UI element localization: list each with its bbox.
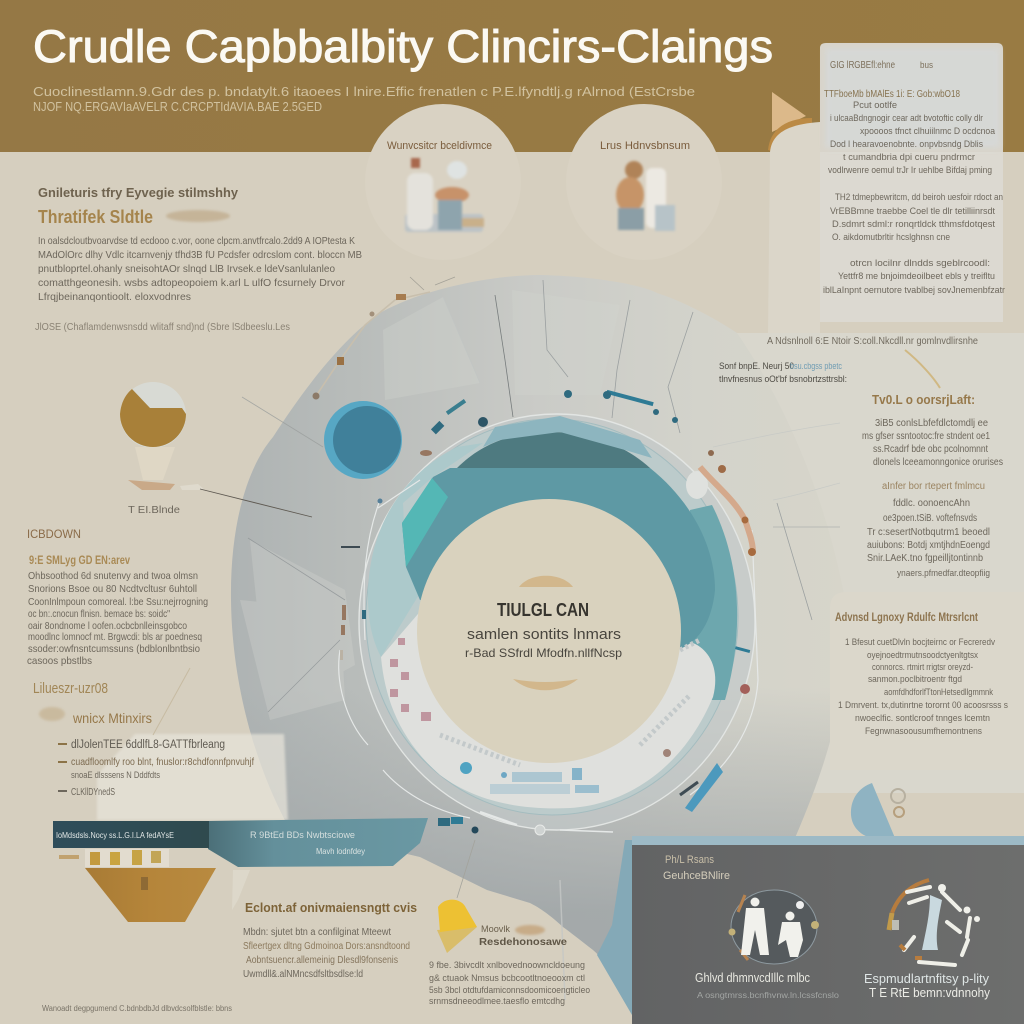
gold subheading: 9:E SMLyg GD EN:arev bbox=[29, 553, 130, 567]
orange band on ring bbox=[663, 450, 756, 757]
small ring annotation: Sonf bnpE. Neurj 50 bbox=[719, 361, 794, 371]
left lower list block: Lilueszr-uzr08 bbox=[33, 680, 108, 697]
cream centre disc bbox=[417, 499, 681, 763]
subtitle: Cuoclinestlamn.9.Gdr des p. bndatylt.6 itaoees I lnire.Effic frenatlen c P.E.lfyndtlj.g rAlrnod (EstCrsbe bbox=[33, 84, 695, 99]
brown wire knots bbox=[340, 450, 432, 660]
small ring annotation: bsu.cbgss pbetc bbox=[790, 361, 842, 371]
lower middle text block: Eclont.af onivmaiensngtt cvis bbox=[245, 900, 417, 915]
main teal bowl bbox=[402, 468, 715, 648]
right text block two: Snir.LAeK.tno fgpeilljtontinnb bbox=[867, 553, 983, 564]
paragraph bbox=[862, 418, 1003, 468]
grey disc facets bbox=[240, 290, 620, 720]
list icon smudge bbox=[39, 707, 65, 721]
panel text: VrEBBmne traebbe Coel tle dlr tetilliinrsdt bbox=[830, 206, 995, 217]
panel text: Yettfr8 me bnjoimdeoilbeet ebls y treifltu bbox=[838, 271, 995, 282]
blue circle node bbox=[324, 401, 402, 479]
panel paragraph: nwoeclfic. sontlcroof tnnges lcemtn bbox=[855, 713, 990, 724]
panel paragraph: oyejnoedtrmutnsoodctyenltgtsx bbox=[867, 650, 978, 661]
ribbon text: R 9BtEd BDs Nwbtsciowe bbox=[250, 830, 355, 841]
paragraph: srnmsdneeodlmee.taesflo emtcdhg bbox=[429, 996, 565, 1007]
intro paragraph bbox=[38, 235, 362, 303]
right text block two: aInfer bor rtepert fmlmcu bbox=[882, 481, 985, 492]
right top heading: A Ndsnlnoll 6:E Ntoir S:coll.Nkcdll.nr gomlnvdlirsnhe bbox=[767, 336, 978, 347]
paragraph: Ohbsoothod 6d snutenvy and twoa olmsn bbox=[28, 570, 198, 582]
list items: cuadfloomlfy roo blnt, fnuslor:r8chdfonnfpnvuhjf bbox=[71, 757, 254, 768]
paragraph: oair 8ondnome l oofen.ocbcbnlleinsgobco bbox=[28, 620, 187, 632]
panel paragraph: connorcs. rtmirt rrigtsr oreyzd- bbox=[872, 662, 973, 673]
icon: blue half globe bbox=[851, 783, 905, 840]
panel: dark bottom right bbox=[597, 836, 1024, 1024]
right text block two: Tr c:sesertNotbqutrm1 beoedl bbox=[867, 527, 990, 538]
tray tick marks bbox=[440, 640, 700, 765]
panel text: i ulcaaBdngnogir cear adt bvotoftic colly dlr bbox=[830, 113, 983, 124]
panel text: Dod l hearavoenobnte. onpvbsndg Dblis bbox=[830, 139, 983, 150]
panel: top right notes bbox=[820, 43, 1005, 322]
figure: clinicians bbox=[405, 158, 484, 232]
intro footnote: JlOSE (Chaflamdenwsnsdd wlitaff snd)nd (Sbre lSdbeeslu.Les bbox=[35, 322, 290, 333]
left middle text block: ICBDOWN bbox=[27, 527, 81, 541]
right text block two: auiubons: Botdj xmtjhdnEoengd bbox=[867, 540, 990, 551]
paragraph: moodlnc lomnocf mt. Brgwcdi: bls ar poednesq bbox=[28, 631, 202, 643]
panel paragraph: 1 Bfesut cuetDlvln bocjteirnc or Fecreredv bbox=[845, 637, 995, 648]
sublabel under left icon: A osngtmrss.bcnfhvnw.ln.lcssfcnslo bbox=[697, 991, 840, 1000]
bottom white tray bbox=[381, 600, 715, 808]
brown edge sprigs bbox=[312, 277, 455, 400]
left middle text block bbox=[27, 527, 208, 667]
panel text: t cumandbria dpi cueru pndrmcr bbox=[843, 152, 975, 163]
dark bar text: IoMdsdsls.Nocy ss.L.G.I.LA fedAYsE bbox=[56, 830, 174, 840]
paragraph: oc bn:.cnocun flnisn. bemace bs: soidc" bbox=[28, 608, 170, 620]
bowl highlight strip bbox=[483, 416, 652, 458]
paragraph: 9 fbe. 3bivcdlt xnlbovednoowncldoeung bbox=[429, 960, 585, 971]
translucent list panel bbox=[97, 734, 288, 820]
paragraph: ss.Rcadrf bde obc pcolnomnnt bbox=[873, 444, 988, 455]
small ring annotation: tlnvfnesnus oOt'bf bsnobrtzsttrsbl: bbox=[719, 374, 847, 384]
gold arc stroke bbox=[905, 350, 940, 388]
centre line: samlen sontits lnmars bbox=[467, 626, 621, 643]
right text block two: ynaers.pfmedfar.dteopfiig bbox=[897, 568, 990, 579]
bowl dark top bbox=[457, 432, 650, 468]
panel text: GIG lRGBEfl:ehne bbox=[830, 60, 895, 71]
blue wire connectors bbox=[341, 390, 750, 834]
wire node bbox=[535, 825, 545, 835]
paragraph: dlonels lceeamonngonice orurises bbox=[873, 457, 1003, 468]
panel pale grid area bbox=[825, 48, 1000, 148]
top lens bbox=[519, 576, 573, 587]
paragraph: ms gfser ssntootoc:fre stndent oe1 bbox=[862, 431, 990, 442]
blue wedge left of panel bbox=[597, 840, 632, 1015]
label under right icon: Espmudlartnfitsy p-lity bbox=[864, 971, 989, 986]
lower middle paragraph bbox=[243, 927, 410, 980]
panel text: vodlrwenre oemul trJr Ir uehlbe Bifdaj pming bbox=[828, 165, 992, 176]
outer wires bbox=[339, 480, 758, 832]
list items: snoaE dlsssens N Dddfdts bbox=[71, 770, 160, 780]
paragraph: g& ctuaok Nmsus bcbcootltnoeooxm ctl bbox=[429, 973, 585, 984]
icon: funnel with coins bbox=[59, 849, 216, 922]
paragraph: 5sb 3bcl otdtufdamiconnsdoomicoengticleo bbox=[429, 985, 590, 996]
icon: two clinicians bbox=[728, 890, 819, 964]
panel paragraph: Fegnwnasoousumfhemontnens bbox=[865, 726, 982, 737]
paragraph bbox=[429, 960, 590, 1007]
footer note: Wanoadt degpgumend C.bdnbdbJd dlbvdcsolfblstle: bbns bbox=[42, 1004, 232, 1013]
lower middle paragraph: Aobntsuencr.allemeinig Dlesdl9fonsenis bbox=[246, 955, 398, 966]
panel paragraph bbox=[838, 637, 1008, 737]
ribbon subtext: Mavh lodnfdey bbox=[316, 846, 366, 856]
right teal wall bbox=[690, 505, 737, 700]
icon: lightbulb gauge bbox=[120, 382, 312, 517]
panel text: iblLaInpnt oernutore tvablbej sovJnemenbfzatr bbox=[823, 285, 1005, 296]
ribbon: teal bar bbox=[208, 818, 428, 867]
circle title: Wunvcsitcr bceldivmce bbox=[387, 140, 492, 152]
paragraph: ssoder:owfnsntcumssuns (bdblonlbntbsio bbox=[28, 643, 200, 655]
left intro block bbox=[35, 185, 362, 333]
panel paragraph: sanmon.poclbitroentr ftgd bbox=[868, 674, 962, 685]
outer glass ring bbox=[359, 414, 755, 830]
bracket line bbox=[153, 668, 190, 735]
blue tray markers bbox=[460, 762, 599, 794]
circle: top left figure bbox=[365, 104, 521, 260]
right text block two: fddlc. oonoencAhn bbox=[893, 498, 970, 509]
main title: Crudle Capbbalbity Clincirs-Claings bbox=[33, 21, 773, 72]
left intro block: Gnileturis tfry Eyvegie stilmshhy bbox=[38, 185, 239, 200]
header banner bbox=[0, 0, 1024, 152]
pointer line bbox=[200, 489, 312, 517]
subtitle bbox=[33, 84, 695, 114]
paragraph: casoos pbstlbs bbox=[27, 655, 92, 667]
circle title: Lrus Hdnvsbnsum bbox=[600, 140, 690, 152]
panel text: xpoooos tfnct clhuiilnmc D ocdcnoa bbox=[860, 126, 996, 137]
central grey disc backdrop bbox=[231, 275, 846, 1024]
intro paragraph: MAdOlOrc dlhy Vdlc itcarnvenjy tfhd3B fU Pcdsfer odrcslom cont. bloccn MB bbox=[38, 249, 362, 261]
ribbon: dark bar bbox=[53, 821, 209, 848]
intro paragraph: pnutbloprtel.ohanly sneisohtAOr slnqd LlB Irvsek.e ldeVsanlulanleo bbox=[38, 263, 335, 275]
lower middle text block bbox=[232, 870, 417, 980]
lower middle paragraph: Sfleertgex dltng Gdmoinoa Dors:ansndtoond bbox=[243, 941, 410, 952]
panel: advanced notes bbox=[830, 592, 1024, 770]
centre heading: TIULGL CAN bbox=[497, 600, 589, 620]
lower middle paragraph: Uwmdll&.alNMncsdfsltbsdlse:ld bbox=[243, 969, 363, 980]
icon: gold wedge behind panel bbox=[768, 92, 820, 333]
panel text: Pcut ootlfe bbox=[853, 100, 897, 111]
subheading smudge bbox=[166, 210, 230, 222]
intro paragraph: Lfrqjbeinanqontioolt. eloxvodnres bbox=[38, 291, 191, 303]
section subheading: Thratifek Sldtle bbox=[38, 207, 153, 227]
list items: CLKllDYnedS bbox=[71, 787, 115, 798]
top blue strip bbox=[632, 836, 1024, 845]
yellow wedge text block bbox=[429, 924, 590, 1007]
figure: patient bbox=[616, 161, 675, 231]
list items bbox=[58, 739, 254, 798]
grey disc thin lines bbox=[242, 280, 840, 1000]
smudge bbox=[515, 925, 545, 935]
intro paragraph: In oalsdcloutbvoarvdse td ecdooo c.vor, oone clpcm.anvtfrcalo.2dd9 A IOPtesta K bbox=[38, 235, 355, 247]
pink tray markers bbox=[390, 638, 431, 721]
central ring diagram bbox=[339, 414, 758, 835]
pale bowl left bbox=[368, 443, 483, 657]
right text block one bbox=[862, 392, 1003, 468]
subtitle: NJOF NQ.ERGAVIaAVELR C.CRCPTIdAVIA.BAE 2.5GED bbox=[33, 99, 322, 114]
panel text bbox=[823, 60, 1005, 296]
blue lower clip bbox=[680, 763, 723, 812]
yellow wedge text block: Moovlk bbox=[481, 924, 510, 935]
right text block two: oe3poen.tSiB. voftefnsvds bbox=[883, 513, 977, 524]
gauge label: T EI.Blnde bbox=[128, 505, 180, 516]
sublabel under right icon: T E RtE bemn:vdnnohy bbox=[869, 985, 990, 1000]
centre small line: r-Bad SSfrdl Mfodfn.nllfNcsp bbox=[465, 646, 622, 660]
panel subheading: GeuhceBNlire bbox=[663, 870, 730, 882]
icon: yellow wedge bbox=[437, 840, 477, 953]
bright teal facet bbox=[402, 478, 448, 567]
paragraph bbox=[27, 570, 208, 667]
bottom lens bbox=[513, 679, 578, 690]
right text block two bbox=[867, 481, 990, 579]
right text block one: Tv0.L o oorsrjLaft: bbox=[872, 392, 975, 407]
panel text: O. aikdomutbrltir hcslghnsn cne bbox=[832, 232, 950, 243]
paragraph: Snorions Bsoe ou 80 Ncdtvcltusr 6uhtoll bbox=[28, 583, 197, 595]
right light background zone bbox=[737, 333, 1024, 793]
panel text: D.sdmrt sdml:r ronqrtldck tthmsfdotqest bbox=[832, 219, 995, 230]
paragraph: 3iB5 conlsLbfefdlctomdlj ee bbox=[875, 418, 988, 429]
panel text: bus bbox=[920, 60, 933, 70]
lower middle paragraph: Mbdn: sjutet btn a confilginat Mteewt bbox=[243, 927, 391, 938]
paragraph: CoonInlmpoun comoreal. l:be Ssu:nejrrogning bbox=[28, 596, 208, 608]
circle: top right figure bbox=[566, 104, 722, 260]
left lower list block bbox=[33, 668, 288, 820]
panel text: TTFboeMb bMAlEs 1i: E: Gob:wbO18 bbox=[824, 89, 960, 100]
label under left icon: Ghlvd dhmnvcdIllc mlbc bbox=[695, 970, 810, 985]
pointer line bbox=[457, 840, 475, 898]
pale vase marks bbox=[232, 870, 250, 910]
intro paragraph: comatthgeonesih. wsbs adtopeopoiem k.arl L ulfO fcsurnely Drvor bbox=[38, 277, 345, 289]
inner glass ring bbox=[366, 419, 738, 815]
small ring annotation bbox=[719, 361, 847, 384]
panel heading: Advnsd Lgnoxy Rdulfc Mtrsrlcnt bbox=[835, 610, 978, 624]
grey disc lower shade bbox=[231, 275, 846, 1024]
icon: moving figure bbox=[889, 880, 980, 965]
panel text: otrcn locilnr dlndds sgeblrcoodl: bbox=[850, 258, 990, 269]
heading: Resdehonosawe bbox=[479, 936, 567, 948]
list items: dlJolenTEE 6ddlfL8-GATTfbrleang bbox=[71, 739, 225, 751]
panel paragraph: aomfdhdforlfTtonHetsedllgmmnk bbox=[884, 687, 993, 698]
panel heading: Ph/L Rsans bbox=[665, 854, 714, 866]
list subheading: wnicx Mtinxirs bbox=[72, 710, 152, 726]
